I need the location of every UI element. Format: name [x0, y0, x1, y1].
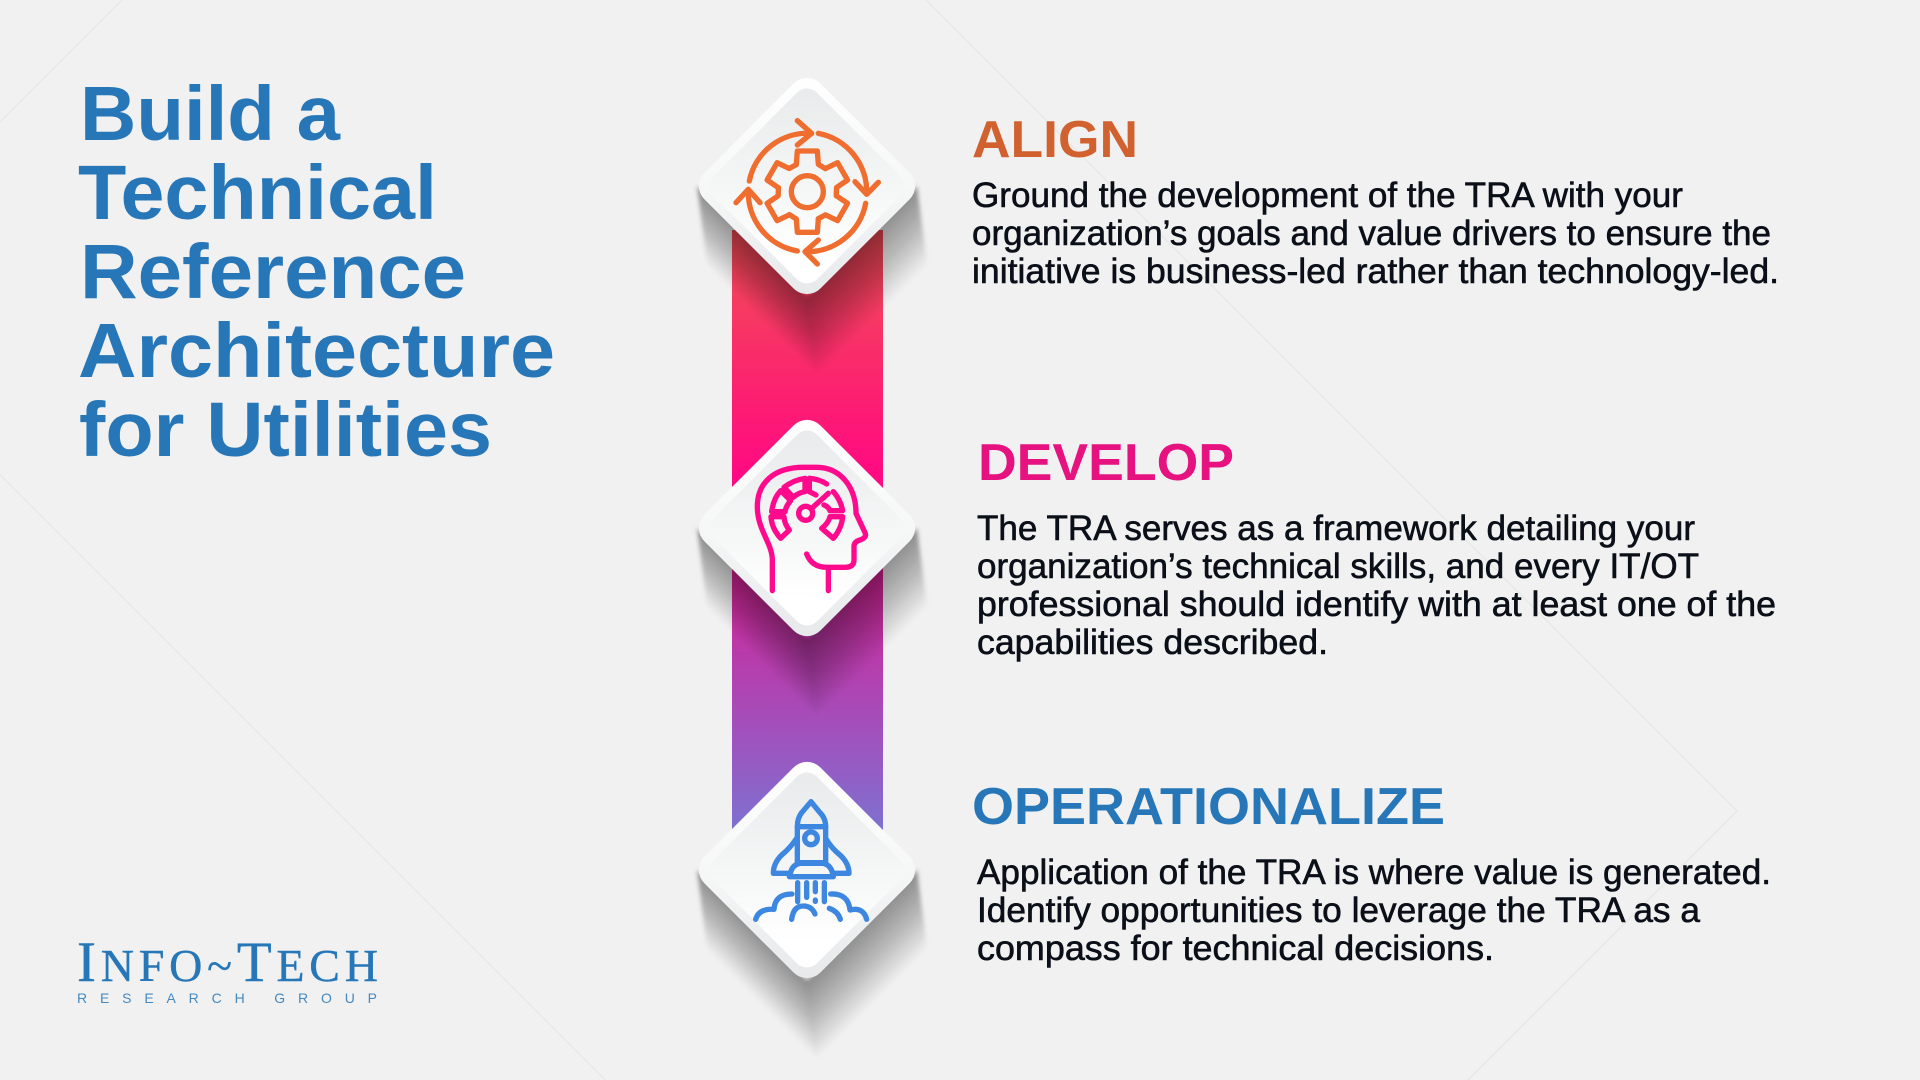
text: align body: Ground the development of the TRA with your [972, 176, 1683, 215]
text: align body: initiative is business-led rather than technology-led. [972, 252, 1779, 291]
logo: Info-Tech Research Group: INFO~TECH [77, 931, 378, 994]
title [78, 71, 555, 473]
heading: align: ALIGN [972, 111, 1138, 169]
panel: align [972, 111, 1779, 291]
title: Reference [80, 229, 466, 315]
text: operationalize body: compass for technical decisions. [977, 929, 1494, 968]
icon: gear with cycle arrows [736, 121, 878, 264]
text: develop body: capabilities described. [977, 623, 1328, 662]
step 2 diamond: develop [691, 412, 927, 716]
title: for Utilities [79, 387, 492, 473]
text: develop body: The TRA serves as a framework detailing your [977, 509, 1695, 548]
gradient ribbon [732, 230, 883, 840]
text: align body [972, 176, 1779, 291]
title: Architecture [78, 308, 555, 394]
title: Build a [80, 71, 341, 157]
step 1 diamond: align [691, 70, 927, 374]
panel: develop [977, 434, 1776, 662]
text: develop body: professional should identify with at least one of the [977, 585, 1776, 624]
icon: rocket [756, 802, 867, 919]
icon: head with gauge [757, 467, 866, 591]
heading: develop: DEVELOP [978, 434, 1234, 492]
text: operationalize body: Identify opportunities to leverage the TRA as a [977, 891, 1701, 930]
panel: operationalize [972, 778, 1771, 968]
logo: Info-Tech Research Group: RESEARCH GROUP [77, 990, 377, 1006]
text: operationalize body: Application of the TRA is where value is generated. [977, 853, 1771, 892]
heading: operationalize: OPERATIONALIZE [972, 778, 1445, 836]
text: operationalize body [977, 853, 1771, 968]
text: develop body: organization’s technical skills, and every IT/OT [977, 547, 1699, 586]
text: develop body [977, 509, 1776, 662]
step 3 diamond: operationalize [691, 754, 927, 1058]
text: align body: organization’s goals and value drivers to ensure the [972, 214, 1771, 253]
title: Technical [78, 150, 437, 236]
